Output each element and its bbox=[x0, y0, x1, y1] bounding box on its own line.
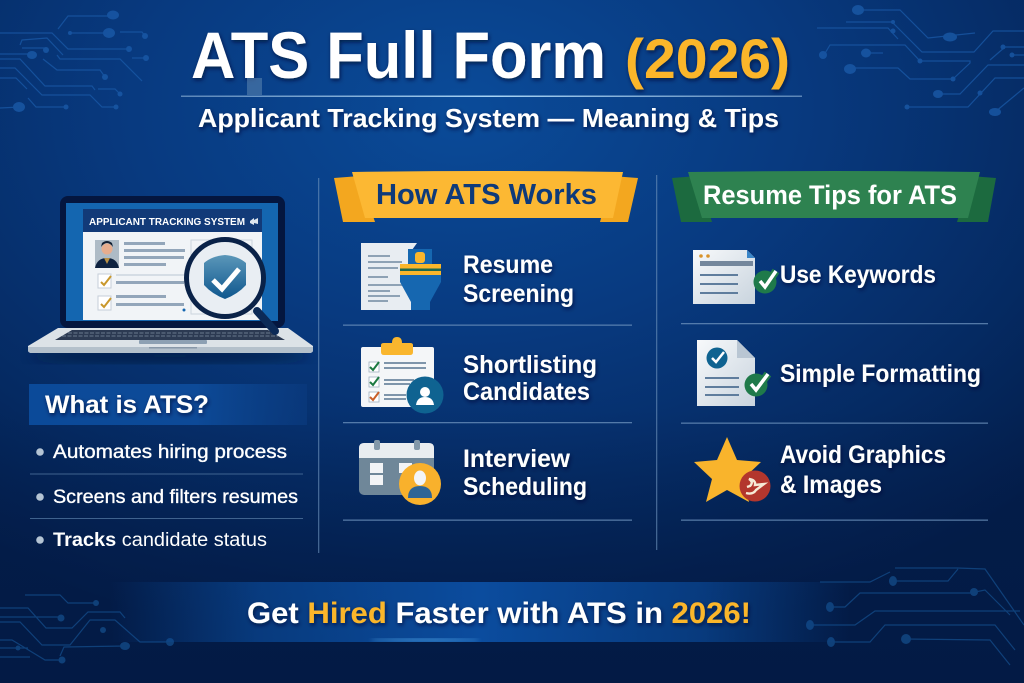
laptop screen: APPLICANT TRACKING SYSTEM bbox=[89, 216, 245, 228]
circuit lines: top left bbox=[0, 10, 149, 112]
item: resume screening: Screening bbox=[463, 280, 574, 308]
bullet: tracks candidate status: Tracks candidate status bbox=[53, 530, 267, 551]
laptop screen bbox=[66, 203, 278, 321]
ribbon: resume tips for ATS bbox=[672, 171, 996, 222]
circuit lines: top right bbox=[817, 5, 1024, 116]
item: avoid graphics and images: Avoid Graphics bbox=[780, 441, 946, 469]
item: resume screening: Resume bbox=[463, 251, 553, 279]
item: interview scheduling: Scheduling bbox=[463, 473, 587, 501]
footer text: Get Hired Faster with ATS in 2026! bbox=[247, 597, 751, 630]
magnifying glass bbox=[186, 240, 275, 331]
icon: resume funnel bbox=[361, 243, 441, 310]
icon: simple formatting document bbox=[697, 340, 768, 406]
title divider bbox=[181, 96, 802, 97]
laptop base bbox=[28, 328, 313, 353]
what is ATS heading bar bbox=[29, 384, 307, 425]
subtitle: Applicant Tracking System — Meaning & Tips bbox=[198, 103, 779, 133]
footer banner bbox=[110, 582, 850, 642]
laptop illustration bbox=[28, 196, 313, 363]
circuit lines: bottom right bbox=[806, 568, 1024, 665]
circuit lines: bottom left bbox=[0, 595, 174, 664]
ribbon: resume tips for ATS: Resume Tips for ATS bbox=[703, 180, 957, 210]
panel: what is ATS bbox=[29, 384, 307, 551]
ribbon: how ATS works: How ATS Works bbox=[376, 179, 597, 211]
bullet: screens and filters resumes: Screens and filters resumes bbox=[53, 487, 298, 508]
title: (2026) bbox=[625, 27, 790, 90]
item: shortlisting candidates bbox=[463, 351, 597, 406]
what is ATS heading: What is ATS? bbox=[45, 391, 209, 419]
item: interview scheduling: Interview bbox=[463, 445, 571, 473]
icon: clipboard shortlist bbox=[361, 337, 444, 414]
item: interview scheduling bbox=[463, 445, 587, 501]
icon: star with no-graphics badge bbox=[694, 437, 770, 502]
title artifact block bbox=[247, 78, 262, 95]
item: resume screening bbox=[463, 251, 574, 308]
item: shortlisting candidates: Shortlisting bbox=[463, 351, 597, 379]
item: use keywords: Use Keywords bbox=[780, 261, 936, 289]
icon: calendar interview bbox=[359, 440, 441, 505]
item: avoid graphics and images: & Images bbox=[780, 471, 882, 499]
ribbon: how ATS works bbox=[334, 171, 638, 222]
title: ATS Full Form bbox=[191, 18, 606, 92]
item: avoid graphics and images bbox=[780, 441, 946, 499]
item: shortlisting candidates: Candidates bbox=[463, 378, 590, 406]
bullet: automates hiring process: Automates hiring process bbox=[53, 442, 287, 463]
column dividers bbox=[318, 175, 657, 553]
icon: keyword document bbox=[693, 250, 776, 304]
laptop lid bbox=[60, 196, 285, 328]
item: simple formatting: Simple Formatting bbox=[780, 360, 981, 388]
